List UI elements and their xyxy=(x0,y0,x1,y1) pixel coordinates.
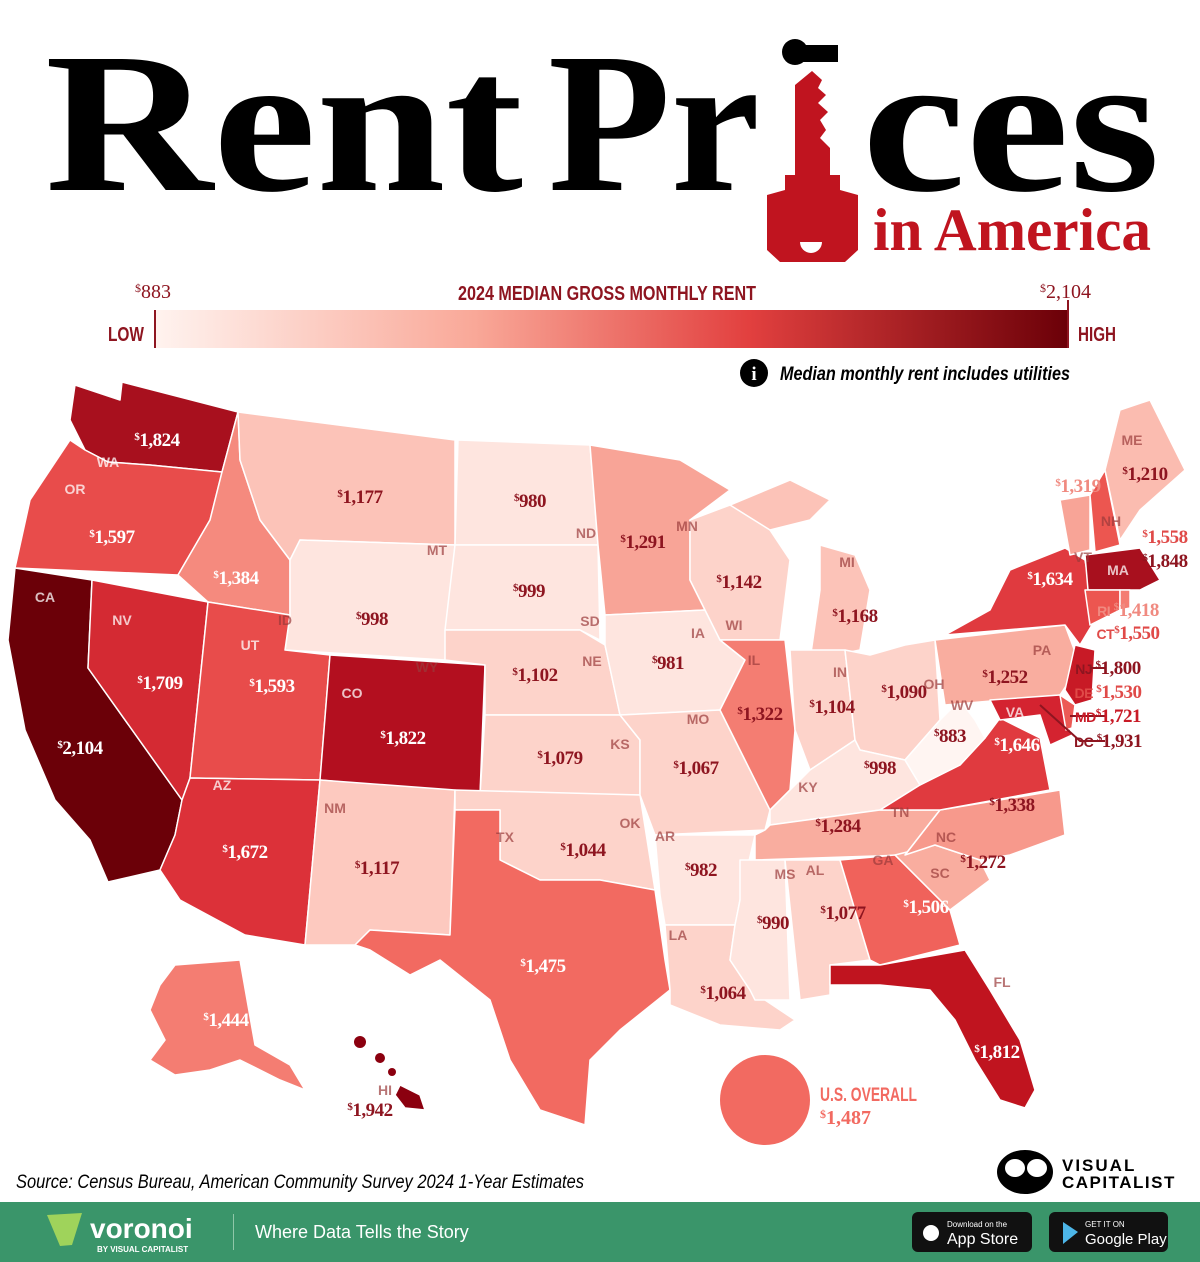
value labels: 1,384 xyxy=(218,568,260,589)
value labels: 998 xyxy=(869,758,896,779)
value labels: $ xyxy=(134,431,140,443)
value labels: $ xyxy=(347,1101,353,1113)
state abbreviations: WI xyxy=(725,617,743,633)
footer: voronoi xyxy=(90,1213,193,1244)
state abbreviations: TN xyxy=(891,804,909,820)
us overall label xyxy=(820,1085,917,1129)
legend: $ xyxy=(135,281,141,295)
map xyxy=(8,382,1185,1145)
value labels: 982 xyxy=(690,860,717,881)
title: Pr xyxy=(548,13,760,234)
value labels: $ xyxy=(982,668,988,680)
value labels: $ xyxy=(513,582,519,594)
state abbreviations: IN xyxy=(833,664,847,680)
value labels: 1,812 xyxy=(979,1042,1020,1063)
state abbreviations: KS xyxy=(610,736,630,752)
value labels: 2,104 xyxy=(62,738,104,759)
state abbreviations: OK xyxy=(620,815,640,831)
value labels: $ xyxy=(560,841,566,853)
value labels: $ xyxy=(537,749,543,761)
legend: 2,104 xyxy=(1046,281,1091,303)
state abbreviations: MI xyxy=(839,554,855,570)
value labels: 1,506 xyxy=(908,897,949,918)
callout lines xyxy=(1040,668,1105,741)
value labels: 1,079 xyxy=(542,748,583,769)
state abbreviations: MO xyxy=(687,711,709,727)
value labels: 1,822 xyxy=(385,728,426,749)
footer: Download on the xyxy=(947,1220,1008,1229)
value labels: RI xyxy=(1097,603,1114,619)
value labels: $ xyxy=(1097,732,1103,744)
state abbreviations: IA xyxy=(691,625,705,641)
logo: visual capitalist: VISUAL xyxy=(1062,1156,1136,1175)
value labels: 1,721 xyxy=(1101,706,1141,727)
value labels: NJ xyxy=(1075,661,1096,677)
value labels: $ xyxy=(716,573,722,585)
value labels: 1,117 xyxy=(360,858,400,879)
value labels: 1,322 xyxy=(742,704,783,725)
value labels: $ xyxy=(380,729,386,741)
value labels: $ xyxy=(1142,552,1148,564)
state abbreviations: MS xyxy=(774,866,796,882)
state abbreviations: NC xyxy=(936,829,956,845)
value labels: $ xyxy=(137,674,143,686)
legend: LOW xyxy=(108,324,144,346)
state abbreviations: ND xyxy=(576,525,596,541)
state abbreviations: UT xyxy=(241,637,260,653)
value labels: 1,800 xyxy=(1101,658,1141,679)
value labels: $ xyxy=(249,677,255,689)
value labels: 1,284 xyxy=(820,816,862,837)
state abbreviations: GA xyxy=(872,852,894,868)
state abbreviations: MT xyxy=(427,542,448,558)
value labels: $ xyxy=(514,492,520,504)
legend: HIGH xyxy=(1078,324,1116,346)
state abbreviations: OH xyxy=(924,676,944,692)
value labels: DE xyxy=(1074,685,1096,701)
value labels: 1,824 xyxy=(139,430,181,451)
value labels: $ xyxy=(620,533,626,545)
title: ces xyxy=(862,13,1160,234)
value labels: 1,102 xyxy=(517,665,558,686)
value labels: 883 xyxy=(939,726,966,747)
legend xyxy=(108,281,1116,387)
state abbreviations: PA xyxy=(1033,642,1051,658)
state abbreviations: TX xyxy=(496,829,515,845)
value labels: 981 xyxy=(657,653,684,674)
state abbreviations: LA xyxy=(669,927,687,943)
logo: visual capitalist xyxy=(997,1150,1176,1194)
state abbreviations: FL xyxy=(993,974,1011,990)
state abbreviations: SD xyxy=(580,613,600,629)
value labels: 1,168 xyxy=(837,606,878,627)
value labels: $ xyxy=(1114,601,1120,613)
footer: BY VISUAL CAPITALIST xyxy=(97,1245,188,1254)
value labels: $ xyxy=(89,528,95,540)
value labels: $ xyxy=(1114,624,1120,636)
value labels: $ xyxy=(864,759,870,771)
value labels: 999 xyxy=(518,581,545,602)
state abbreviations: VT xyxy=(1074,549,1092,565)
state abbreviations: ME xyxy=(1122,432,1142,448)
state abbreviations: CA xyxy=(35,589,55,605)
value labels: 1,044 xyxy=(565,840,607,861)
value labels: $ xyxy=(673,759,679,771)
value labels: $ xyxy=(881,683,887,695)
value labels: $ xyxy=(213,569,219,581)
value labels: $ xyxy=(685,861,691,873)
value labels: 1,272 xyxy=(965,852,1006,873)
value labels: $ xyxy=(960,853,966,865)
value labels: 1,077 xyxy=(825,903,867,924)
value labels: 1,319 xyxy=(1060,476,1101,497)
value labels: 1,177 xyxy=(342,487,384,508)
state abbreviations: WV xyxy=(951,697,974,713)
state abbreviations: NY xyxy=(1042,523,1062,539)
state abbreviations: KY xyxy=(798,779,818,795)
title xyxy=(45,13,1160,263)
value labels: 1,104 xyxy=(814,697,856,718)
value labels: 1,418 xyxy=(1119,600,1159,621)
title: Rent xyxy=(45,13,523,234)
state abbreviations: NE xyxy=(582,653,602,669)
value labels: $ xyxy=(356,610,362,622)
footer: GET IT ON xyxy=(1085,1220,1125,1229)
value labels: $ xyxy=(757,914,763,926)
state abbreviations: CO xyxy=(342,685,363,701)
state abbreviations: HI xyxy=(378,1082,392,1098)
value labels: 1,338 xyxy=(994,795,1035,816)
title: in America xyxy=(873,197,1151,263)
legend: i xyxy=(751,364,757,385)
value labels: 1,848 xyxy=(1147,551,1188,572)
value labels: $ xyxy=(989,796,995,808)
value labels: $ xyxy=(520,957,526,969)
value labels: 1,646 xyxy=(999,735,1040,756)
value labels: DC xyxy=(1074,734,1097,750)
value labels: $ xyxy=(809,698,815,710)
value labels: $ xyxy=(1096,707,1102,719)
value labels: 1,634 xyxy=(1032,569,1074,590)
us overall label: $ xyxy=(820,1107,826,1121)
value labels: 998 xyxy=(361,609,388,630)
value labels: 1,064 xyxy=(705,983,747,1004)
value labels: 1,593 xyxy=(254,676,295,697)
state abbreviations: MN xyxy=(676,518,698,534)
value labels xyxy=(57,430,1188,1121)
value labels: $ xyxy=(1142,528,1148,540)
value labels: 1,444 xyxy=(208,1010,250,1031)
value labels: $ xyxy=(700,984,706,996)
value labels: 1,291 xyxy=(625,532,666,553)
legend: 2024 MEDIAN GROSS MONTHLY RENT xyxy=(458,283,756,305)
state abbreviations: IL xyxy=(748,652,761,668)
legend: $ xyxy=(1040,281,1046,295)
footer: Where Data Tells the Story xyxy=(255,1222,469,1242)
state abbreviations: SC xyxy=(930,865,950,881)
value labels: $ xyxy=(57,739,63,751)
value labels: 1,558 xyxy=(1147,527,1188,548)
us overall label: U.S. OVERALL xyxy=(820,1085,917,1106)
legend: 883 xyxy=(141,281,171,303)
footer: App Store xyxy=(947,1231,1018,1248)
value labels: 1,550 xyxy=(1119,623,1159,644)
value labels: $ xyxy=(832,607,838,619)
value labels: 1,530 xyxy=(1101,682,1142,703)
us overall circle xyxy=(720,1055,810,1145)
value labels: 1,942 xyxy=(352,1100,393,1121)
value labels: $ xyxy=(1096,683,1102,695)
value labels: 1,252 xyxy=(987,667,1028,688)
us overall label: 1,487 xyxy=(826,1107,871,1129)
logo: visual capitalist: CAPITALIST xyxy=(1062,1173,1176,1192)
value labels: $ xyxy=(974,1043,980,1055)
value labels: $ xyxy=(903,898,909,910)
value labels: 1,672 xyxy=(227,842,268,863)
value labels: $ xyxy=(222,843,228,855)
source: Source: Census Bureau, American Community Survey 2024 1-Year Estimates xyxy=(16,1172,584,1193)
state abbreviations: NH xyxy=(1101,513,1121,529)
value labels: 1,931 xyxy=(1102,731,1142,752)
value labels: 980 xyxy=(519,491,546,512)
value labels: $ xyxy=(737,705,743,717)
value labels: $ xyxy=(815,817,821,829)
state abbreviations: NM xyxy=(324,800,346,816)
value labels: CT xyxy=(1097,626,1115,642)
value labels: 1,210 xyxy=(1127,464,1168,485)
state abbreviations: AR xyxy=(655,828,675,844)
state abbreviations: ID xyxy=(278,612,292,628)
value labels: $ xyxy=(1122,465,1128,477)
value labels: $ xyxy=(1055,477,1061,489)
hawaii xyxy=(354,1036,425,1110)
value labels: $ xyxy=(1096,659,1102,671)
value labels: $ xyxy=(203,1011,209,1023)
state abbreviations: OR xyxy=(64,481,86,497)
footer xyxy=(0,1202,1200,1262)
value labels: 1,090 xyxy=(886,682,927,703)
alaska xyxy=(150,960,305,1090)
state abbreviations: AL xyxy=(806,862,825,878)
value labels: $ xyxy=(1027,570,1033,582)
legend: Median monthly rent includes utilities xyxy=(780,364,1070,385)
value labels: $ xyxy=(337,488,343,500)
state abbreviations xyxy=(35,432,1142,1098)
value labels: 1,475 xyxy=(525,956,566,977)
value labels: 1,067 xyxy=(678,758,720,779)
value labels: 1,597 xyxy=(94,527,136,548)
state abbreviations: AZ xyxy=(213,777,232,793)
footer: Google Play xyxy=(1085,1231,1167,1248)
state abbreviations: AK xyxy=(246,977,266,993)
value labels: $ xyxy=(820,904,826,916)
state abbreviations: WA xyxy=(97,454,119,470)
value labels: $ xyxy=(512,666,518,678)
icon: key xyxy=(767,39,858,262)
state abbreviations: WY xyxy=(416,659,439,675)
value labels: $ xyxy=(652,654,658,666)
value labels: 1,709 xyxy=(142,673,183,694)
value labels: MD xyxy=(1075,709,1096,725)
state abbreviations: VA xyxy=(1006,704,1024,720)
value labels: $ xyxy=(355,859,361,871)
state abbreviations: NV xyxy=(112,612,132,628)
value labels: $ xyxy=(994,736,1000,748)
value labels: 1,142 xyxy=(721,572,762,593)
value labels: 990 xyxy=(762,913,789,934)
value labels: $ xyxy=(934,727,940,739)
state abbreviations: MA xyxy=(1107,562,1129,578)
